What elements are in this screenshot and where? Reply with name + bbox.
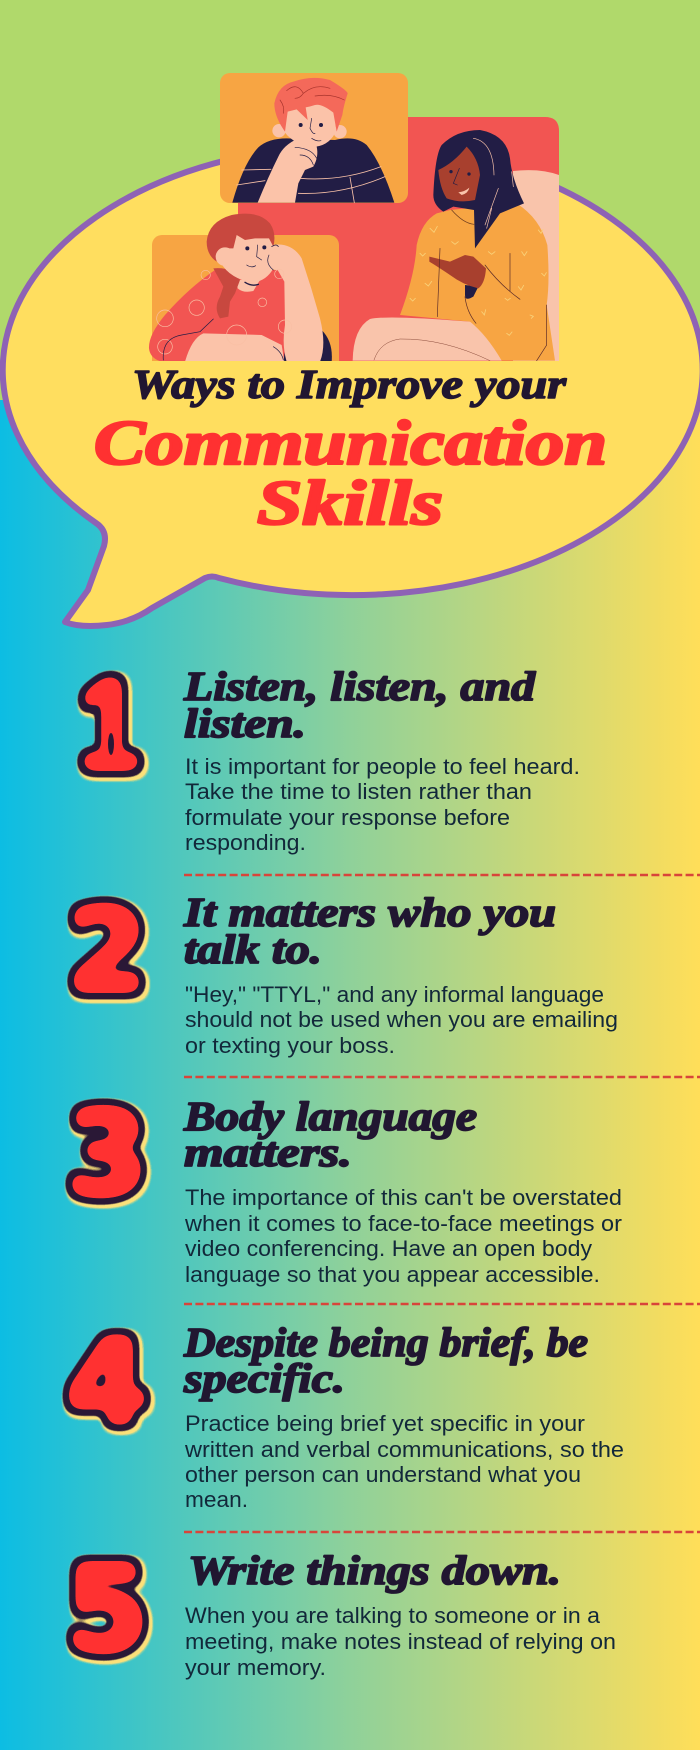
green top band [0, 0, 700, 400]
title line 3: Skills [257, 468, 443, 538]
body 4 [184, 1411, 624, 1512]
lower orange panel [152, 235, 339, 375]
heading 4 [183, 1319, 588, 1401]
heading 1 [183, 663, 536, 746]
body 1: It is important for people to feel heard. [185, 754, 580, 779]
item 1 [183, 663, 580, 855]
title [94, 361, 607, 538]
body 3 [184, 1185, 622, 1287]
numeral 5: 5 [66, 1540, 148, 1678]
body 3: when it comes to face-to-face meetings or [184, 1211, 622, 1236]
top orange panel [220, 73, 408, 203]
man [232, 78, 394, 203]
numeral 3: 3 [67, 1087, 147, 1222]
numeral 2: 2 [67, 884, 147, 1017]
heading 4: Despite being brief, be [183, 1319, 588, 1365]
speech bubble [3, 145, 700, 626]
illustration: three people on a video call [149, 73, 559, 375]
heading 1: Listen, listen, and [183, 663, 536, 709]
red panel [238, 117, 559, 361]
body 3: video conferencing. Have an open body [185, 1236, 592, 1261]
body 1 [185, 754, 580, 855]
body 5: your memory. [185, 1655, 326, 1680]
body 4: mean. [185, 1487, 248, 1512]
heading 3: Body language [183, 1093, 477, 1139]
body 5: When you are talking to someone or in a [185, 1603, 601, 1628]
heading 2: It matters who you [183, 889, 556, 935]
title line 1: Ways to Improve your [132, 361, 567, 407]
body 1: Take the time to listen rather than [185, 779, 532, 804]
girl [149, 214, 332, 362]
body 2 [185, 982, 618, 1058]
heading 3: matters. [184, 1129, 352, 1175]
heading 1: listen. [184, 700, 306, 746]
item 4 [183, 1319, 624, 1512]
body 4: written and verbal communications, so the [184, 1437, 624, 1462]
title line 2: Communication [94, 408, 607, 478]
numeral 1: 1 [79, 653, 139, 796]
body 2: or texting your boss. [185, 1033, 395, 1058]
heading 2: talk to. [184, 926, 322, 972]
body 4: Practice being brief yet specific in your [185, 1411, 585, 1436]
body 1: responding. [185, 830, 306, 855]
heading 2 [183, 889, 556, 972]
item 2 [183, 889, 618, 1058]
body 2: "Hey," "TTYL," and any informal language [185, 982, 604, 1007]
item 3 [183, 1093, 622, 1287]
body 3: language so that you appear accessible. [185, 1262, 600, 1287]
item 5 [185, 1547, 616, 1680]
body 3: The importance of this can't be overstated [185, 1185, 622, 1210]
body 5: meeting, make notes instead of relying on [185, 1629, 616, 1654]
body 2: should not be used when you are emailing [185, 1007, 618, 1032]
heading 4: specific. [183, 1355, 345, 1401]
armchair [513, 170, 559, 361]
body 5 [185, 1603, 616, 1680]
woman [353, 130, 555, 361]
heading 3 [183, 1093, 477, 1175]
numeral 4: 4 [67, 1315, 147, 1450]
body 1: formulate your response before [185, 805, 510, 830]
heading 5: Write things down. [188, 1547, 561, 1593]
body 4: other person can understand what you [185, 1462, 581, 1487]
